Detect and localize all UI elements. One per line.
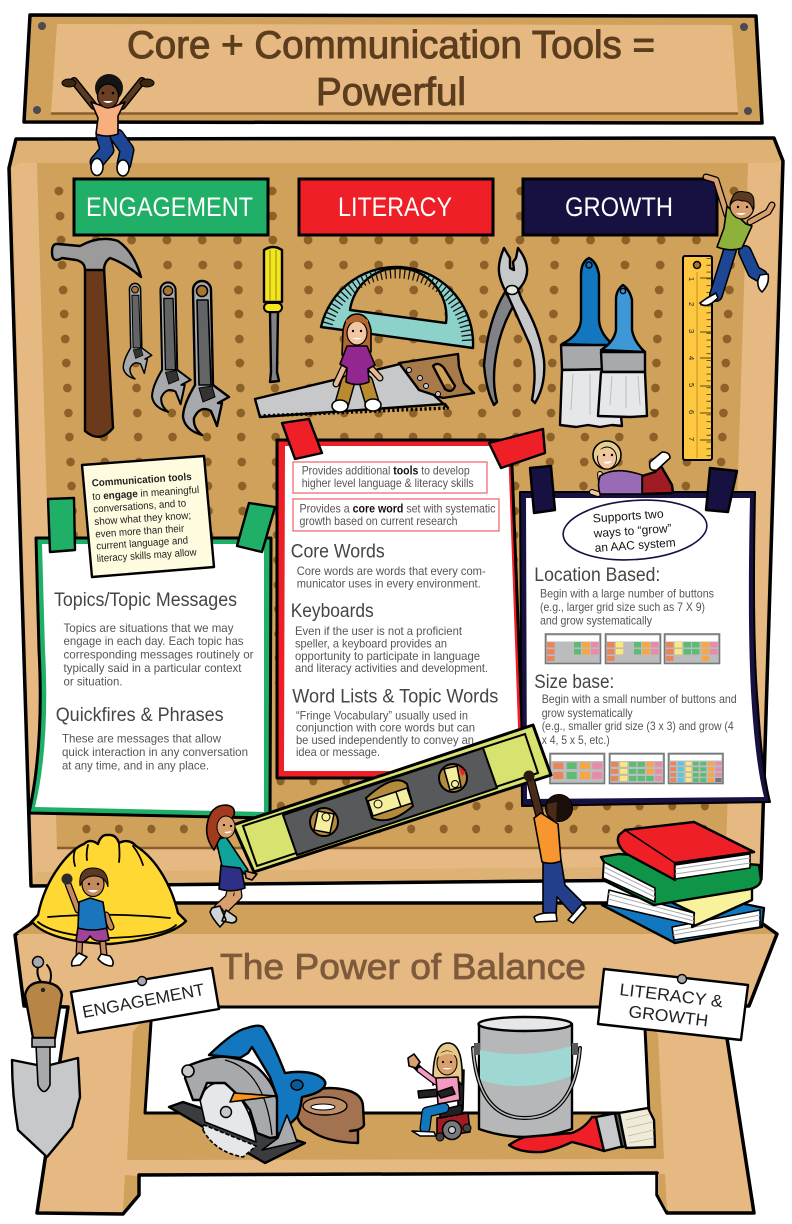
button: engagement	[74, 179, 268, 235]
icon: book stack	[601, 822, 764, 943]
callout: tools: Provides additional tools to develop	[302, 464, 470, 478]
red note text: Keyboards	[291, 601, 374, 622]
character: girl in wheelchair	[408, 1043, 471, 1141]
navy note text: size base: x 4, 5 x 5, etc.)	[542, 734, 610, 747]
callout: tools	[293, 462, 487, 493]
character: boy above engagement	[62, 74, 154, 176]
book: yellow	[607, 884, 752, 927]
icon: spirit level	[233, 725, 551, 872]
icon: ruler: 6	[687, 410, 696, 414]
navy note text: location based	[534, 565, 714, 628]
character: boy holding level	[524, 770, 586, 923]
icon: hand saw	[255, 354, 474, 417]
shelf heading: The Power of Balance	[220, 946, 586, 987]
navy note text: size base: (e.g., smaller grid size (3 x 3) and grow (4	[542, 720, 734, 733]
icon: ruler: 4	[687, 356, 696, 360]
sticky note: communication tools: conversations, and to	[93, 498, 187, 515]
navy note text: size base	[534, 672, 737, 747]
character: boy climbing right	[700, 177, 772, 306]
icon: screwdriver	[264, 247, 282, 382]
icon: ruler: 3	[687, 329, 696, 333]
red note text: and literacy activities and development.	[295, 662, 488, 675]
book: green	[601, 854, 761, 905]
red note text: Core Words	[291, 542, 385, 562]
level vial right	[439, 764, 467, 792]
button: literacy: LITERACY	[338, 192, 452, 222]
character: kid on hard hat	[62, 868, 113, 966]
red note text: idea or message.	[296, 746, 380, 759]
button: engagement: ENGAGEMENT	[86, 192, 253, 222]
icon: ruler: 7	[687, 437, 696, 441]
icon: hammer	[52, 239, 141, 437]
label: engagement	[71, 968, 219, 1033]
navy note text: location based: Location Based:	[534, 565, 660, 586]
icon: trowel	[12, 956, 80, 1157]
pegboard holes	[54, 187, 738, 833]
icon: ruler: 5	[687, 383, 696, 387]
red tapes	[282, 419, 545, 468]
red note text: opportunity to participate in language	[295, 650, 480, 663]
green note text: corresponding messages routinely or	[64, 648, 254, 662]
button: growth	[523, 179, 717, 235]
oval callout: supports two ways	[561, 496, 709, 564]
oval callout: supports two ways: ways to “grow”	[592, 521, 672, 541]
location grid 2	[606, 634, 660, 664]
icon: circular saw	[169, 1026, 325, 1163]
red note text: be used independently to convey an	[296, 734, 474, 747]
icon: hard hat	[32, 835, 186, 944]
pegboard	[9, 138, 783, 886]
callout: core word	[293, 499, 499, 531]
character: girl sitting on saw	[332, 314, 381, 412]
green tapes	[48, 498, 275, 552]
green note text: Quickfires & Phrases	[56, 705, 224, 726]
red note text: Word Lists & Topic Words	[292, 686, 498, 708]
sticky note: communication tools: literacy skills may allow	[96, 547, 197, 565]
callout: core word: growth based on current research	[300, 515, 458, 528]
callout: tools: higher level language & literacy skills	[302, 477, 474, 490]
navy note text: location based: (e.g., larger grid size such as 7 X 9)	[540, 601, 705, 614]
navy tapes	[530, 466, 737, 513]
green note text: Topics/Topic Messages	[54, 590, 237, 611]
icon: ruler	[683, 256, 712, 460]
navy note text: location based: Begin with a large number of buttons	[540, 588, 714, 600]
location grid 3	[664, 634, 720, 664]
note: literacy (red)	[277, 419, 545, 778]
location grid 1	[546, 634, 600, 664]
red note text	[291, 542, 498, 759]
icon: pliers	[484, 248, 544, 405]
icon: red paint brush	[509, 1108, 655, 1152]
icon: small wrench	[123, 283, 152, 379]
green note text: engage in each day. Each topic has	[64, 635, 244, 648]
sticky note: communication tools: current language and	[96, 535, 189, 552]
size grid 3	[668, 754, 723, 784]
navy note text: size base: Size base:	[534, 672, 614, 693]
sticky note: communication tools: Communication tools	[91, 472, 192, 489]
red note text: Core words are words that every com-	[297, 565, 486, 578]
label: literacy and growth: GROWTH	[628, 1002, 709, 1030]
navy note text: size base: grow systematically	[542, 707, 633, 720]
size grid 1	[550, 754, 604, 784]
size grid 2	[610, 754, 664, 784]
icon: protractor	[321, 267, 473, 348]
green note text: at any time, and in any place.	[62, 760, 209, 772]
sticky note: communication tools: even more than their	[95, 524, 185, 540]
icon: large wrench	[183, 281, 229, 435]
green note text: or situation.	[64, 676, 122, 688]
navy note text: size base: Begin with a small number of buttons and	[542, 693, 737, 706]
label: engagement: ENGAGEMENT	[81, 980, 206, 1022]
icon: paint can	[473, 1017, 580, 1137]
icon: ruler: 1	[687, 277, 696, 281]
title text: Powerful	[316, 71, 466, 114]
character: girl lying on note	[592, 441, 673, 494]
button: growth: GROWTH	[565, 192, 673, 222]
green note text	[54, 590, 254, 772]
red note text: speller, a keyboard provides an	[295, 638, 447, 650]
sticky note: communication tools: to engage in meaningful	[92, 485, 199, 503]
icon: tape roll	[296, 1088, 364, 1143]
label: literacy and growth	[598, 969, 748, 1040]
button: literacy	[299, 179, 493, 235]
green note text: These are messages that allow	[62, 732, 222, 746]
label: literacy and growth: LITERACY &	[619, 980, 725, 1011]
sticky note: communication tools	[82, 456, 214, 577]
sticky note: communication tools: show what they know;	[94, 511, 191, 528]
level vial left	[310, 808, 338, 836]
oval callout: supports two ways: an AAC system	[594, 535, 676, 555]
callout: core word: Provides a core word set with systematic	[300, 502, 496, 516]
icon: large paint brush	[560, 258, 622, 427]
icon: ruler: 2	[687, 302, 696, 306]
navy note text: location based: and grow systematically	[540, 614, 652, 628]
red note text: conjunction with core words but can	[296, 722, 475, 735]
red note text: municator uses in every environment.	[297, 578, 481, 590]
workbench	[15, 903, 777, 1214]
note: engagement (green)	[29, 498, 275, 818]
book: blue	[602, 900, 764, 943]
book: red	[618, 822, 754, 880]
red note text: “Fringe Vocabulary” usually used in	[296, 710, 468, 722]
character: girl holding level	[207, 805, 257, 927]
red note text: Even if the user is not a proficient	[295, 625, 463, 638]
green note text: typically said in a particular context	[64, 662, 242, 675]
note: growth (navy)	[520, 466, 770, 806]
level vial center	[366, 780, 413, 820]
green note text: Topics are situations that we may	[64, 622, 234, 635]
icon: small paint brush	[598, 285, 647, 417]
title text: Core + Communication Tools =	[127, 24, 655, 67]
title sign	[24, 15, 762, 123]
icon: medium wrench	[152, 282, 191, 412]
title text	[127, 24, 655, 114]
green note text: quick interaction in any conversation	[62, 746, 248, 759]
oval callout: supports two ways: Supports two	[592, 507, 664, 525]
